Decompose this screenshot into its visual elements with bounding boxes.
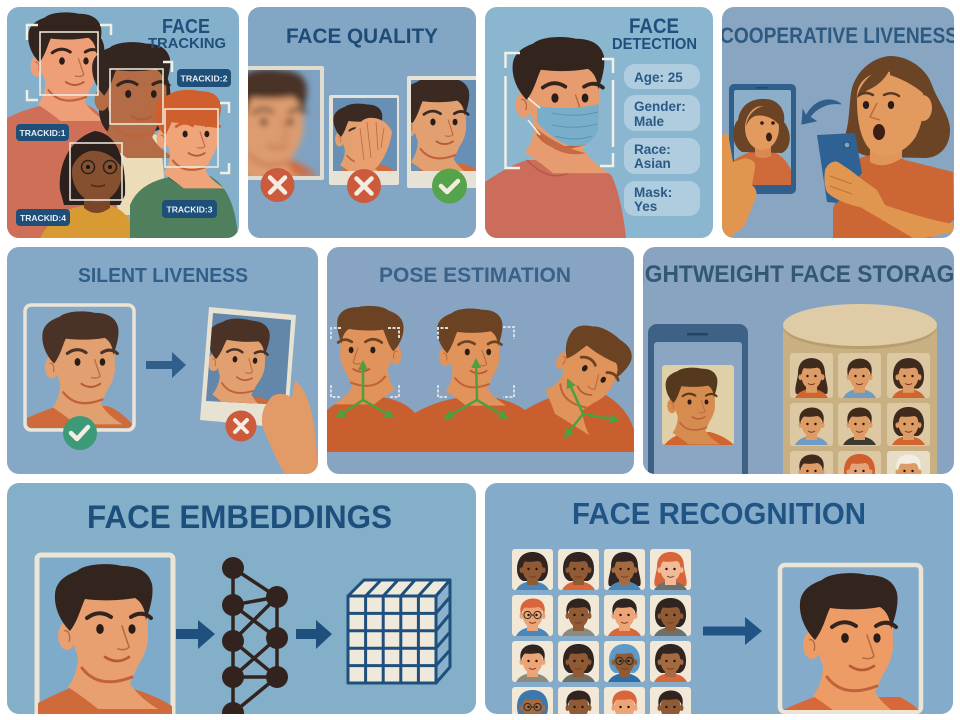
live person frame <box>25 305 134 430</box>
database cylinder <box>783 304 937 474</box>
attribute: age: Age: 25 <box>634 70 683 85</box>
panel: face recognition <box>485 483 953 720</box>
label: trackid 4: TRACKID:4 <box>20 213 66 223</box>
head: tilted <box>530 315 642 435</box>
neural network <box>222 557 288 720</box>
label: trackid 2 <box>177 69 231 87</box>
icon: red cross 2 <box>347 169 381 203</box>
arrow to recognized face <box>703 617 762 645</box>
man with face mask <box>485 37 626 238</box>
attribute: mask: Yes <box>634 199 657 214</box>
arrow to network <box>176 620 215 649</box>
icon: green check <box>432 168 467 204</box>
title: FACE <box>629 15 679 38</box>
label: trackid 1 <box>16 124 69 141</box>
stored face tiles <box>790 353 930 492</box>
label: trackid 2: TRACKID:2 <box>180 74 228 84</box>
arrow to cube <box>296 620 332 649</box>
head: facing left <box>333 306 404 404</box>
person 4 with glasses and yellow sweater <box>40 131 138 238</box>
icon: red cross 1 <box>260 168 294 202</box>
icon: red cross <box>226 410 256 442</box>
face detection brackets <box>506 53 613 168</box>
panel: face detection <box>485 7 713 238</box>
title: POSE ESTIMATION <box>379 264 571 287</box>
embedding cube <box>348 580 450 683</box>
panel: face embeddings <box>7 483 476 720</box>
shirts <box>327 388 634 452</box>
photo with hand covering face <box>329 95 399 185</box>
attribute: race: Race: <box>634 142 671 157</box>
panel: lightweight face storage <box>624 247 960 494</box>
hand holding photo <box>262 380 318 474</box>
panel: face quality <box>248 7 476 238</box>
person 3 with red hair and green sweater <box>130 90 238 238</box>
label: trackid 1: TRACKID:1 <box>20 128 66 138</box>
hand over face <box>352 118 392 170</box>
head pose axes: head 2 <box>445 360 507 418</box>
attribute: gender: Gender: <box>634 99 686 114</box>
panel: face tracking <box>7 7 239 238</box>
head pose axes: head 3 <box>565 380 618 437</box>
subtitle: TRACKING <box>148 35 226 52</box>
label: trackid 3 <box>162 200 217 218</box>
head pose axes: head 1 <box>337 362 393 417</box>
dashed corner markers <box>331 327 514 397</box>
input face frame <box>37 555 173 720</box>
spoof photo <box>200 307 296 428</box>
handheld phone <box>817 133 862 203</box>
person 1 with red sweater <box>7 12 118 238</box>
hand and forearm <box>824 162 953 238</box>
title: FACE EMBEDDINGS <box>87 499 392 535</box>
person 2 with long curly hair and cream top <box>92 42 175 215</box>
title: SILENT LIVENESS <box>78 265 248 287</box>
tracking boxes <box>27 25 229 200</box>
woman <box>833 56 954 238</box>
label: trackid 3: TRACKID:3 <box>166 204 213 214</box>
title: FACE <box>162 16 210 38</box>
attribute: race <box>624 138 700 174</box>
panel: cooperative liveness <box>720 7 958 238</box>
recognized face frame <box>780 565 921 718</box>
attribute: gender <box>624 95 700 131</box>
icon: teal check <box>63 416 97 450</box>
panel: silent liveness <box>7 247 318 474</box>
sharp photo <box>407 76 476 188</box>
attribute: race: Asian <box>634 156 671 171</box>
attribute: gender: Male <box>634 114 665 129</box>
arrow <box>146 352 186 378</box>
label: trackid 4 <box>16 209 70 226</box>
hand holding phone <box>722 133 756 238</box>
arrow: curved <box>802 100 841 124</box>
subtitle: DETECTION <box>612 36 697 53</box>
attribute: mask: Mask: <box>634 185 672 200</box>
gallery grid of faces <box>512 549 691 720</box>
phone showing selfie <box>729 84 796 194</box>
attribute: mask <box>624 181 700 216</box>
title: FACE RECOGNITION <box>572 496 866 531</box>
blurred photo <box>248 66 324 180</box>
panel: pose estimation <box>327 247 642 474</box>
head: facing front <box>437 309 506 406</box>
title: FACE QUALITY <box>286 24 438 48</box>
phone with enrolled face <box>648 324 748 494</box>
attribute: age <box>624 64 700 89</box>
face mask <box>528 98 599 146</box>
